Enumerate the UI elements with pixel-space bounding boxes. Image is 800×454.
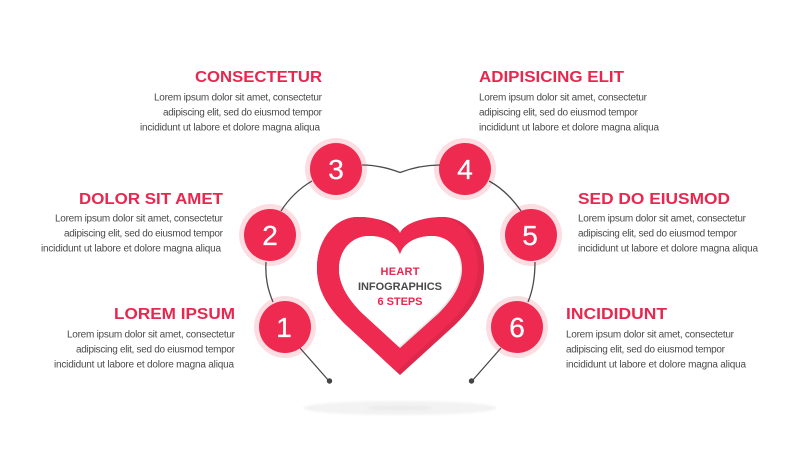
step 6 badge: 6 (509, 312, 525, 343)
step 3 badge: 3 (328, 154, 344, 185)
text block: lorem ipsum: LOREM IPSUM (114, 306, 235, 323)
text block: consectetur (140, 69, 323, 134)
step 1 badge (254, 296, 316, 358)
text block: lorem ipsum (54, 306, 236, 370)
step 2 badge (239, 204, 301, 266)
heart centre label (358, 266, 442, 308)
text block: incididunt: Lorem ipsum dolor sit amet, consectetur (566, 330, 735, 340)
ground shadow (303, 401, 497, 415)
text block: incididunt: incididunt ut labore et dolore magna aliqua (566, 360, 746, 370)
step 5 badge: 5 (522, 220, 538, 251)
step 1 badge: 1 (276, 312, 292, 343)
text block: dolor sit amet: adipiscing elit, sed do eiusmod tempor (64, 228, 224, 240)
step 5 badge (500, 204, 562, 266)
connector line with end dots (266, 165, 535, 384)
text block: consectetur: CONSECTETUR (195, 69, 322, 86)
text block: incididunt (566, 306, 746, 370)
text block: sed do eiusmod: SED DO EIUSMOD (578, 191, 730, 208)
step 3 badge (305, 138, 367, 200)
text block: dolor sit amet: Lorem ipsum dolor sit amet, consectetur (55, 214, 224, 224)
text block: sed do eiusmod: incididunt ut labore et dolore magna aliqua (578, 244, 758, 254)
heart ring (317, 217, 484, 375)
text block: dolor sit amet (41, 191, 224, 254)
text block: incididunt: INCIDIDUNT (566, 306, 667, 323)
text block: adipisicing elit: Lorem ipsum dolor sit amet, consectetur (479, 92, 648, 104)
text block: dolor sit amet: DOLOR SIT AMET (79, 191, 223, 208)
text block: consectetur: adipiscing elit, sed do eiusmod tempor (163, 108, 323, 118)
text block: adipisicing elit (479, 69, 659, 134)
step 2 badge: 2 (262, 220, 278, 251)
text block: sed do eiusmod: adipiscing elit, sed do eiusmod tempor (578, 228, 738, 240)
text block: adipisicing elit: incididunt ut labore et dolore magna aliqua (479, 122, 659, 134)
text block: lorem ipsum: Lorem ipsum dolor sit amet, consectetur (67, 330, 236, 340)
step 6 badge (486, 296, 548, 358)
text block: sed do eiusmod: Lorem ipsum dolor sit amet, consectetur (578, 214, 747, 224)
text block: consectetur: Lorem ipsum dolor sit amet, consectetur (154, 92, 323, 104)
text block: incididunt: adipiscing elit, sed do eiusmod tempor (566, 344, 726, 356)
text block: consectetur: incididunt ut labore et dolore magna aliqua (140, 122, 320, 134)
heart centre label: INFOGRAPHICS (358, 281, 442, 293)
text block: dolor sit amet: incididunt ut labore et dolore magna aliqua (41, 244, 221, 254)
step 4 badge (434, 138, 496, 200)
text block: sed do eiusmod (578, 191, 758, 254)
text block: lorem ipsum: incididunt ut labore et dolore magna aliqua (54, 360, 234, 370)
text block: adipisicing elit: adipiscing elit, sed do eiusmod tempor (479, 108, 639, 118)
heart centre label: HEART (380, 266, 420, 278)
text block: adipisicing elit: ADIPISICING ELIT (479, 69, 624, 86)
heart centre label: 6 STEPS (378, 296, 422, 308)
step 4 badge: 4 (457, 154, 473, 185)
text block: lorem ipsum: adipiscing elit, sed do eiusmod tempor (76, 344, 236, 356)
